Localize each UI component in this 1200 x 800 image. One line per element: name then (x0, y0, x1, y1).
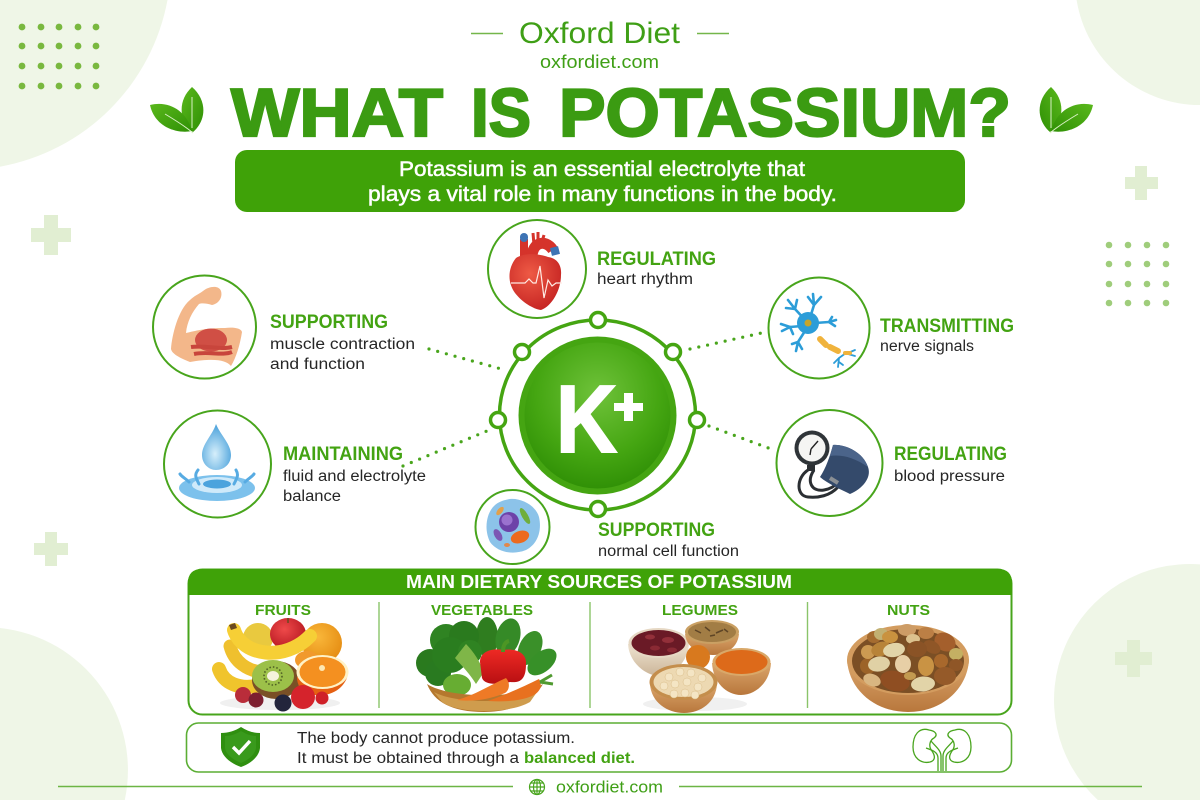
function: fluid balance: balance (283, 488, 341, 505)
function: muscle: SUPPORTING (270, 311, 388, 333)
brand header (471, 17, 729, 72)
chickpeas bowl (650, 684, 717, 713)
source: vegetables: VEGETABLES (431, 602, 533, 619)
function: fluid balance: fluid and electrolyte (283, 468, 426, 485)
function: cell function: SUPPORTING (598, 519, 715, 541)
panel header: MAIN DIETARY SOURCES OF POTASSIUM (406, 572, 792, 592)
K+ symbol: K (556, 366, 617, 473)
ring nodes (490, 312, 704, 516)
function: heart rhythm: REGULATING (597, 248, 716, 270)
brand header: oxfordiet.com (540, 51, 659, 72)
dotted connector lines (403, 332, 771, 466)
icon: neuron (768, 278, 870, 378)
outer ring (500, 320, 696, 510)
icon: left leaves (150, 87, 203, 133)
function: nerve signals (768, 278, 1014, 378)
note box: It must be obtained through a (297, 750, 519, 767)
dot grid: top left (19, 24, 99, 89)
icon: shield with check (221, 727, 260, 767)
footer (58, 778, 1142, 796)
decorative plus marks (31, 166, 1158, 677)
brown lentils bowl (685, 634, 739, 655)
source: vegetables (416, 602, 561, 712)
function: muscle: and function (270, 356, 365, 373)
note box: balanced diet. (524, 750, 635, 767)
food illustration: legume bowls (628, 620, 771, 713)
function: muscle (153, 276, 415, 378)
icon: water drop (164, 410, 271, 518)
function: fluid balance (164, 410, 426, 518)
title (231, 75, 1011, 151)
function: fluid balance: MAINTAINING (283, 443, 403, 465)
icon: flexed arm (153, 276, 256, 378)
function: cell function: normal cell function (598, 543, 739, 560)
source: legumes (628, 602, 771, 713)
icon: right leaves (1040, 87, 1093, 133)
function: blood pressure: REGULATING (894, 443, 1007, 465)
icon: blood pressure monitor (776, 410, 882, 516)
panel: dietary sources (188, 569, 1012, 714)
function: heart rhythm: heart rhythm (597, 271, 693, 288)
small orange pepper (686, 645, 710, 669)
function: cell function (476, 490, 739, 564)
note box: The body cannot produce potassium. (297, 730, 575, 747)
food illustration: fruit pile (219, 618, 348, 712)
kidney beans bowl (628, 644, 689, 676)
intro banner: plays a vital role in many functions in the body. (368, 183, 837, 206)
icon: globe (530, 780, 544, 794)
title: POTASSIUM? (559, 75, 1011, 151)
icon: cell (476, 490, 550, 564)
intro banner: Potassium is an essential electrolyte that (399, 158, 805, 181)
red lentils bowl (712, 663, 771, 695)
brand header: Oxford Diet (519, 17, 681, 50)
intro banner (235, 150, 965, 212)
title: WHAT (231, 75, 443, 151)
note box (186, 723, 1012, 772)
function: nerve signals: nerve signals (880, 338, 974, 355)
dot grid: right (1106, 242, 1169, 306)
source: legumes: LEGUMES (662, 602, 738, 619)
function: heart rhythm (488, 220, 716, 318)
function: blood pressure: blood pressure (894, 468, 1005, 485)
central K+ emblem (490, 312, 704, 516)
source: nuts (847, 602, 969, 712)
panel header (188, 569, 1012, 595)
green disc (518, 336, 676, 494)
icon: heart (488, 220, 586, 318)
icon: kidneys (913, 729, 971, 771)
function: blood pressure (776, 410, 1007, 516)
food illustration: nut bowl (847, 624, 969, 712)
source: nuts: NUTS (887, 602, 930, 619)
function: muscle: muscle contraction (270, 336, 415, 353)
food illustration: vegetable basket (416, 616, 561, 712)
source: fruits: FRUITS (255, 602, 311, 619)
function: nerve signals: TRANSMITTING (880, 315, 1014, 337)
source: fruits (219, 602, 348, 712)
footer: oxfordiet.com (556, 778, 663, 796)
title: IS (471, 75, 531, 151)
